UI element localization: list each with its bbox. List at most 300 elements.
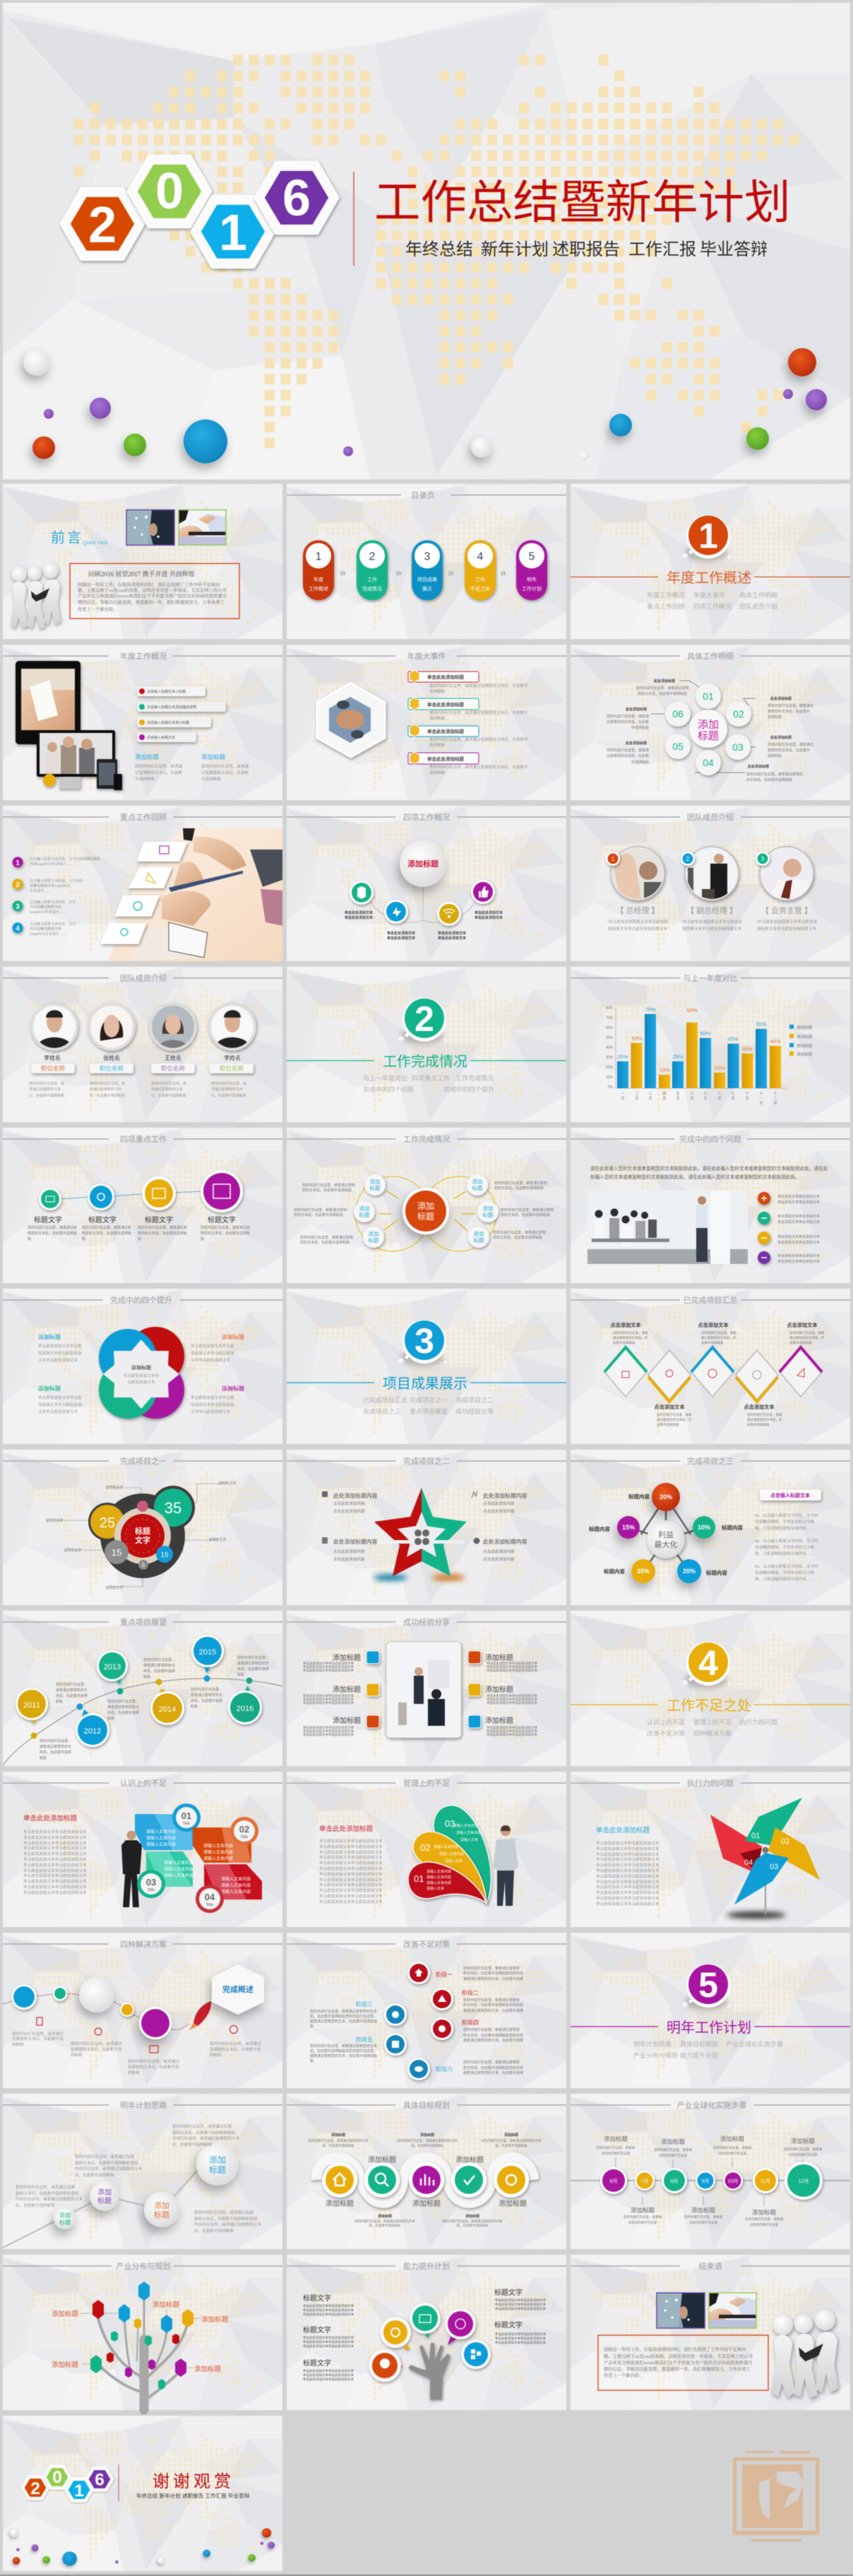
- node 1: [39, 1188, 61, 1210]
- main circle: 添加标题: [407, 859, 439, 869]
- left text: 单击此处添加文本单击此处添加文本: [303, 2373, 354, 2378]
- node text: 贴: [28, 1236, 31, 1241]
- panel: section 3: [287, 1289, 566, 1444]
- event 1: 单击此处添加标题: [427, 674, 465, 680]
- roles: 【 副总经理 】: [686, 905, 737, 915]
- note 03: 选择粘贴: [768, 753, 782, 758]
- text box: [598, 2335, 768, 2390]
- side text: 文本单击此处添加文本: [191, 1409, 230, 1414]
- capsule 4: 不足之处: [470, 585, 490, 592]
- icon list: 单击添加文本单击添加文本: [777, 1194, 820, 1199]
- flower diagram: 03: [732, 741, 744, 753]
- node text: 制您的文本后，在此框中选择粘: [82, 1231, 131, 1236]
- panel: closing remarks: [571, 2255, 850, 2410]
- badge 1: 1: [698, 516, 718, 556]
- stage text: 您的内容打在这里，或者通过复制您: [463, 1966, 520, 1971]
- position tags: 职位名称: [220, 1065, 244, 1072]
- member text: 者通过复制您的文本: [29, 1087, 61, 1092]
- photo: desk and hands: [109, 828, 282, 961]
- small labels: 后，在此框中选择粘贴: [322, 2143, 354, 2148]
- timeline notes: 本后，在此框中选择: [40, 1750, 71, 1755]
- node purple: [139, 2007, 172, 2039]
- label 1: [137, 686, 205, 696]
- heading: 与上一年度对比: [684, 973, 737, 983]
- side text: 单击此处添加文本单击此: [191, 1395, 234, 1400]
- tree labels: 添加标题: [194, 2365, 221, 2373]
- heading: 成功经验分享: [403, 1617, 450, 1627]
- label bottom right: [473, 1538, 527, 1562]
- text block left: 添加标题: [135, 753, 160, 761]
- description: 饰，言简意赅的说明分项内容……: [755, 1525, 814, 1531]
- stage text: 或者通过复制您的文本，在此框中选择: [463, 1976, 523, 1981]
- label bottom right: 此处添加标题内容: [483, 1538, 527, 1545]
- pinwheel: 01: [751, 1832, 760, 1840]
- section title: 明年工作计划: [667, 2020, 751, 2036]
- node text: 制您的文本后，在此框中选择粘: [28, 1231, 77, 1236]
- chart captions: 说明性文字: [105, 1585, 124, 1590]
- bar chart: 50%: [700, 1030, 711, 1037]
- section items: 认识上的不足: [647, 1718, 685, 1726]
- role descriptions: 加段落文本单击此处添加段落文本: [608, 926, 667, 931]
- panel: project three: [571, 1450, 850, 1605]
- node titles: 标题文字: [34, 1215, 62, 1224]
- left text: 单击此处添加文本单击此处添加文本: [303, 2308, 354, 2313]
- text box: 回顾这一年的工作，在取得成绩的同时，我们也找到了工作中的不足和问: [78, 581, 220, 588]
- upper labels: 点击添加文本: [787, 1322, 818, 1328]
- photo: technology: [657, 2293, 705, 2328]
- captions: 您的文本后，在此框中选择粘贴: [494, 1186, 544, 1191]
- text box: [70, 564, 239, 619]
- icon list: 单击添加文本单击添加文本: [777, 1253, 820, 1258]
- paragraph: 请在此处输入您的文本或者复制您的文本粘贴到此处。请在此处输入您的文本或者复制您的文本粘贴到此处。请在此: [590, 1165, 828, 1171]
- side text: 文本单击此处添加文本: [191, 1357, 230, 1363]
- block 01: 请输入文本内容: [146, 1835, 176, 1841]
- block 04: [196, 1864, 262, 1913]
- text block: 单击此处添加文本单击此处添加文本: [596, 1862, 660, 1868]
- right titles: 标题文字: [494, 2320, 523, 2330]
- capsule 3: 项目成果: [417, 576, 437, 583]
- captions: 您的文本后，在此框中选择粘贴: [501, 1212, 550, 1217]
- left text: 单击此处添加文本单击此处添加文本: [303, 1700, 354, 1705]
- satellites: 添加: [473, 1230, 484, 1237]
- arrows: [378, 1191, 475, 1231]
- small labels: [308, 2133, 542, 2228]
- bar chart: 55%: [756, 1021, 767, 1027]
- text block: 单击此处添加标题: [596, 1826, 650, 1835]
- text box: 回顾2016 展望2017 携手并进 共创辉煌: [88, 570, 195, 578]
- text block left: 中选择粘贴: [135, 776, 155, 782]
- text block: 单击此处添加文本单击此处添加文本: [596, 1846, 660, 1852]
- node 3: [142, 1176, 176, 1210]
- captions: 单击此处添加文本: [345, 915, 373, 920]
- subtitle: 新年计划: [481, 240, 549, 259]
- lower labels: 您的内容打在这里，或者: [747, 1412, 782, 1417]
- badge 3: [402, 1320, 446, 1364]
- section items: 已完成项目汇总: [363, 1396, 407, 1404]
- badge 5: 5: [698, 1965, 718, 2005]
- text block: 单击此处添加文本单击此处添加文本: [23, 1845, 87, 1851]
- icon list: 单击添加文本单击添加文本: [777, 1220, 820, 1224]
- bar chart: 20%: [606, 1066, 614, 1070]
- panel: section 5: [571, 1933, 850, 2088]
- satellites: 标题: [370, 1184, 381, 1191]
- icon list: 单击添加文本单击添加文本: [777, 1234, 820, 1239]
- member text: 者通过复制您的文本: [90, 1087, 121, 1092]
- upper labels: 此框中选择粘贴: [613, 1340, 636, 1345]
- businessman: [121, 1830, 142, 1907]
- circle 4: 标题: [209, 2165, 226, 2175]
- node labels: 标题内容: [628, 1493, 650, 1500]
- description: 容需概括精炼，不用多余的文字修: [755, 1570, 814, 1575]
- leaf 02: [413, 1832, 487, 1903]
- circle 4: [196, 2143, 239, 2186]
- note 05: 过复制您的文本后，在此框: [607, 753, 649, 758]
- node text: 您的内容打在这里，或者通过复: [138, 1225, 187, 1230]
- block 01: Title: [183, 1822, 190, 1826]
- side text: 文本单击此处添加文本: [38, 1357, 78, 1363]
- text block: 单击此处添加文本单击此处添加文本: [319, 1899, 383, 1904]
- bar chart: 月: [773, 1102, 777, 1106]
- panel: management gaps: [287, 1772, 566, 1927]
- timeline notes: 粘贴: [237, 1672, 244, 1677]
- stage labels: 阶段一: [436, 1971, 453, 1978]
- satellites: 标题: [472, 1184, 483, 1191]
- right text: 单击此处添加文本单击此处添加文本: [487, 1700, 537, 1705]
- description: 02、点击输入简要文字内容，文字内: [755, 1538, 818, 1544]
- capsule 4: [465, 540, 496, 600]
- timeline notes: 粘贴: [191, 1704, 198, 1709]
- text block right: 过复制您的文本后，在此框: [201, 770, 249, 775]
- roles: 【 业务主管 】: [761, 905, 812, 915]
- position tags: 职位名称: [41, 1065, 65, 1072]
- right text: 单击此处添加文本单击此处添加文本: [487, 1697, 537, 1702]
- right titles: 标题文字: [494, 2288, 523, 2297]
- leaf 01: 请输入文本内容: [426, 1869, 451, 1874]
- left text: 单击此处添加文本单击此处添加文本: [303, 1725, 354, 1730]
- event 3: 选择粘贴: [429, 742, 446, 748]
- idea text: 您的文本后，在此框中选择粘贴您的: [16, 2190, 79, 2196]
- capsule 1: 1: [316, 551, 322, 563]
- closing title: 谢谢观赏: [153, 2472, 234, 2491]
- timeline notes: 您的内容打在这里，: [191, 1687, 222, 1692]
- bubble 2011: 2011: [23, 1701, 40, 1710]
- node text: 贴: [82, 1236, 85, 1241]
- leaf 02: 请输入文本内容: [439, 1852, 464, 1856]
- circle 1: 标题: [59, 2219, 71, 2226]
- panel: section 4: [571, 1611, 850, 1766]
- title button: [760, 1489, 821, 1501]
- section items: 四种解决方案: [693, 1729, 732, 1737]
- icon: small hexagon 1: 1: [74, 2481, 84, 2500]
- upper text: 过您的内容打在这里: [602, 2151, 631, 2156]
- note 02: [768, 696, 813, 720]
- note 02: 您的内容打在这里，或者通过: [768, 703, 813, 708]
- node diagram: 20%: [683, 1568, 696, 1575]
- captions: 单击此处添加文本: [387, 936, 415, 941]
- big labels: 添加标题: [455, 2155, 484, 2164]
- block 04: 请输入文本内容: [221, 1883, 251, 1888]
- text block: 单击此处添加文本单击此处添加文本: [23, 1835, 87, 1840]
- description: 容需概括精炼，不用多余的文字修: [755, 1544, 814, 1550]
- upper titles: 添加标题: [604, 2135, 628, 2142]
- node 2: [88, 1183, 114, 1210]
- goal circles: [322, 2162, 529, 2198]
- right text: 单击此处添加文本单击此处添加文本: [495, 2332, 546, 2337]
- label top left: 此处添加标题内容: [333, 1492, 378, 1499]
- text block: 单击此处添加文本单击此处添加文本: [23, 1829, 87, 1835]
- lower labels: 您的内容打在这里，或者: [657, 1412, 692, 1417]
- note 01: 您的内容打在这里，或者通过复制: [636, 686, 689, 691]
- solution text: 您的内容打在这里，或者通过: [210, 2041, 261, 2046]
- member 3: [756, 847, 813, 900]
- idea text: 您的内容打在这里，或者通过复制: [16, 2184, 75, 2190]
- note 01: 您的文本后，在此框中选择粘贴: [638, 691, 687, 696]
- side titles: 添加标题: [222, 1333, 244, 1340]
- text block: 单击此处添加文本单击此处添加文本: [596, 1901, 660, 1907]
- tree labels: 添加标题: [153, 2301, 179, 2309]
- captions: 单击此处添加文本: [345, 910, 373, 915]
- left text: 单击此处添加文本单击此处添加文本: [303, 2303, 354, 2308]
- icon list: [758, 1192, 820, 1264]
- icon: hexagon 0: 0: [155, 163, 184, 220]
- heading: 具体目标规划: [403, 2100, 450, 2110]
- node text: 您的内容打在这里，或者通过复: [82, 1225, 131, 1230]
- bar chart: 30%: [606, 1056, 614, 1060]
- role descriptions: •单击此处添加段落文本单击此处添: [756, 919, 817, 924]
- icon circle teal: [350, 881, 374, 905]
- point 2: 2: [16, 881, 20, 889]
- panel: key project outlook: [3, 1611, 282, 1766]
- text block: [596, 1826, 660, 1907]
- leaf 01: 01: [414, 1873, 424, 1884]
- timeline curve: [3, 1678, 282, 1765]
- timeline notes: 或者通过复制您的文: [40, 1744, 71, 1749]
- month names: 6月: [610, 2178, 617, 2184]
- heading: 认识上的不足: [120, 1778, 167, 1788]
- diamond row: [604, 1347, 822, 1402]
- point 1: 1: [16, 859, 20, 867]
- node titles: 标题文字: [88, 1215, 117, 1224]
- side titles: 添加标题: [222, 1385, 244, 1392]
- flower diagram: 06: [672, 708, 684, 720]
- node text: 制您的文本后，在此框中选择粘: [201, 1231, 250, 1236]
- note 01: 此处添加标题: [654, 679, 675, 684]
- text box: 题。主要反映于xx及xxx的风格，宗明还有待进一步探索。尤其是网上的公司: [78, 587, 227, 593]
- right text: 单击此处添加文本单击此处添加文本: [495, 2340, 546, 2345]
- label bottom right: 点击此处添加内容: [483, 1549, 515, 1554]
- solution text: 您的内容打在这里，或者通过: [12, 2031, 64, 2037]
- circle 1: [54, 2207, 76, 2229]
- timeline notes: 您的内容打在这里，: [40, 1739, 71, 1743]
- text block: 单击此处添加文本单击此处添加文本: [596, 1873, 660, 1879]
- point 1: 点击输入简要文本内容，文字内容需概况精练: [30, 857, 101, 861]
- heading: 目录页: [411, 491, 435, 500]
- block 03: 请输入文本内容: [164, 1860, 193, 1866]
- bubble 2015: [191, 1635, 224, 1673]
- centre text: 单击此处添加文本单: [124, 1373, 160, 1378]
- section items: 具体目标规划: [680, 2040, 718, 2048]
- panel: four key works: [3, 1128, 282, 1283]
- label 4: 点击输入标题文本: [147, 735, 175, 740]
- portrait 3: [149, 1003, 197, 1051]
- panel: key work review: [3, 806, 282, 961]
- event 4: [408, 752, 528, 775]
- text block: 单击此处添加标题: [23, 1814, 78, 1823]
- heading: 完成项目之三: [687, 1456, 734, 1466]
- icon list: 单击添加文本单击添加文本: [777, 1200, 820, 1205]
- note 05: 您的内容打在这里，或者通: [607, 748, 649, 753]
- goal icons: [333, 2174, 516, 2186]
- panel: four improvements: [3, 1289, 282, 1444]
- captions: 单击此处添加文本: [475, 910, 503, 915]
- point 3: Lisa(2011)专业设计……: [30, 910, 66, 914]
- section items: 完成项目之一: [410, 1396, 448, 1404]
- section items: 团队成员介绍: [739, 602, 777, 610]
- stage text: 或者通过复制您的文本，在此框中选择: [463, 2008, 523, 2013]
- right text: 单击此处添加文本单击此处添加文本: [487, 1664, 537, 1669]
- left text: 单击此处添加文本单击此处添加文本: [303, 1697, 354, 1702]
- chart captions: 说明性文字: [218, 1481, 237, 1486]
- upper text: 您的内容打在这里，或者通: [713, 2145, 751, 2150]
- idea text: 您的文本后，在此框中选择粘贴您的: [172, 2130, 236, 2135]
- position tags: 职位名称: [100, 1065, 124, 1072]
- member 1: [606, 847, 664, 900]
- timeline notes: 或者通过复制您的文: [237, 1661, 269, 1666]
- icon: small hexagon 1: [65, 2478, 93, 2502]
- node diagram: 35%: [637, 1568, 650, 1575]
- timeline notes: 本后，在此框中选择: [107, 1710, 139, 1715]
- upper labels: 通过复制您的文本后，在: [701, 1335, 736, 1340]
- tablet with photo: [386, 1642, 461, 1738]
- bubble chart: [88, 1486, 195, 1578]
- event 2: 选择粘贴: [429, 715, 446, 721]
- heading: 年度工作概况: [120, 651, 167, 661]
- circle 3: 标题: [154, 2210, 169, 2219]
- label bottom left: 此处添加标题内容: [333, 1538, 378, 1545]
- side text: 处添加文本单击此处添加: [191, 1350, 234, 1356]
- upper text: 过您的内容打在这里: [659, 2153, 688, 2158]
- event 1: 您的内容打在这里，或者通过复制您的文本后，在此框中: [429, 683, 528, 688]
- capsule 5: 工作计划: [522, 585, 542, 592]
- bar chart: 10%: [606, 1075, 614, 1080]
- timeline notes: 或者通过复制您的文: [191, 1693, 222, 1698]
- node text: 贴: [138, 1236, 141, 1241]
- event 2: 单击此处添加标题: [427, 701, 465, 708]
- solution text: 择粘贴: [128, 2070, 140, 2075]
- leaf 01: [408, 1862, 487, 1903]
- bar chart: 70%: [606, 1016, 614, 1020]
- section title: 工作完成情况: [383, 1054, 467, 1070]
- lower titles: 添加标题: [631, 2207, 655, 2214]
- bar chart: 月: [759, 1102, 763, 1106]
- upper labels: 通过复制您的文本后，在: [613, 1335, 648, 1340]
- stage text: 贴: [310, 2024, 314, 2029]
- stage text: 或者通过复制您的文本，在此框中选择: [463, 2070, 523, 2075]
- heading: 前言: [51, 530, 83, 546]
- upper text: 您的内容打在这里，或者通: [784, 2147, 822, 2152]
- right text: 单击此处添加文本单击此处添加文本: [495, 2298, 546, 2303]
- section items: 改善不足对策: [647, 1729, 685, 1737]
- node text: 制您的文本后，在此框中选择粘: [138, 1231, 187, 1236]
- left text: 单击此处添加文本单击此处添加文本: [303, 2312, 354, 2317]
- solution text: 您的内容打在这里，或者通过: [71, 2041, 122, 2046]
- section items: 与上一年度对比: [363, 1074, 407, 1082]
- point 4: [13, 922, 76, 936]
- closing subtitle: 年终总结 新年计划 述职报告 工作汇报 毕业答辩: [136, 2492, 250, 2499]
- icon: small hexagon 6: 6: [95, 2470, 105, 2490]
- panel: work details: [571, 645, 850, 800]
- legend: [789, 1025, 813, 1057]
- idea text: 内容打在这里，或者通过复制您的文本: [75, 2166, 143, 2171]
- right text: 单击此处添加文本单击此处添加文本: [495, 2302, 546, 2307]
- role descriptions: •单击此处添加段落文本单击此处添: [681, 919, 742, 924]
- satellites: 标题: [483, 1211, 494, 1218]
- chart captions: 说明性文字: [105, 1485, 124, 1490]
- heading: 能力提升计划: [403, 2261, 450, 2271]
- circle 1: 添加: [59, 2212, 71, 2219]
- description: 容需概括精炼，不用多余的文字修: [755, 1519, 814, 1525]
- member text: 您的内容打在这里，或: [211, 1081, 246, 1086]
- bar chart: 五: [676, 1092, 680, 1096]
- bubble 2013: 2013: [104, 1663, 121, 1671]
- timeline notes: 粘贴: [107, 1716, 114, 1721]
- small labels: 您的内容打在这里，或者通过复制您的文本: [397, 2138, 458, 2143]
- captions: 单击此处添加文本: [438, 931, 466, 936]
- big labels: 添加标题: [499, 2199, 527, 2208]
- small labels: 后，在此框中选择粘贴: [456, 2223, 489, 2228]
- note 02: 此处添加标题: [770, 696, 792, 701]
- bar chart: 九: [731, 1091, 735, 1096]
- timeline notes: 或者通过复制您的文: [143, 1663, 175, 1668]
- panel: team intro: [571, 806, 850, 961]
- idea text: 您的文本后，在此框中选择粘贴您的: [194, 2216, 258, 2222]
- captions: 单击此处添加文本: [387, 931, 415, 936]
- icon: hexagon 1: [192, 196, 274, 267]
- captions: 您的文本后，在此框中选择粘贴: [294, 1212, 343, 1217]
- panel: annual overview: [3, 645, 282, 800]
- small icons: [37, 2017, 237, 2053]
- subtitle: 年终总结: [405, 240, 473, 259]
- block 03: 请输入文本内容: [164, 1866, 193, 1872]
- icon: three figures: [772, 2310, 838, 2398]
- upper labels: [610, 1322, 825, 1345]
- stage labels: 阶段四: [462, 2019, 479, 2026]
- description: 03、点击输入简要文字内容，文字内: [755, 1563, 818, 1569]
- label top left: [322, 1491, 378, 1514]
- icon circle purple: [471, 880, 495, 904]
- bar chart: 60%: [686, 1007, 698, 1013]
- stage text: 您的内容打在这里，或者通过复制您的文本: [310, 2044, 377, 2049]
- satellites: 添加: [483, 1205, 493, 1212]
- lower labels: 通过复制您的文本后，在: [657, 1417, 692, 1422]
- captions: 您的内容打在这里，或者通过复制: [494, 1181, 547, 1186]
- small labels: 后，在此框中选择粘贴: [411, 2143, 443, 2148]
- capsule 3: [412, 540, 443, 600]
- stage labels: 阶段六: [436, 2065, 453, 2073]
- capsule 2: 2: [369, 551, 376, 563]
- panel: section 1: [571, 484, 850, 639]
- photo: training room: [587, 1191, 748, 1264]
- bar chart: 月: [648, 1097, 652, 1101]
- right text: 单击此处添加文本单击此处添加文本: [487, 1693, 537, 1698]
- upper labels: 您的内容打在这里，或者: [701, 1330, 736, 1335]
- block 01: 请输入文本内容: [146, 1829, 176, 1835]
- section items: 重点项目展望: [410, 1407, 448, 1415]
- note 05: [607, 741, 649, 765]
- captions: 您的内容打在这里，或者通过复制: [302, 1183, 355, 1188]
- icon row right: [468, 1651, 481, 1728]
- circle 2: 标题: [97, 2197, 112, 2205]
